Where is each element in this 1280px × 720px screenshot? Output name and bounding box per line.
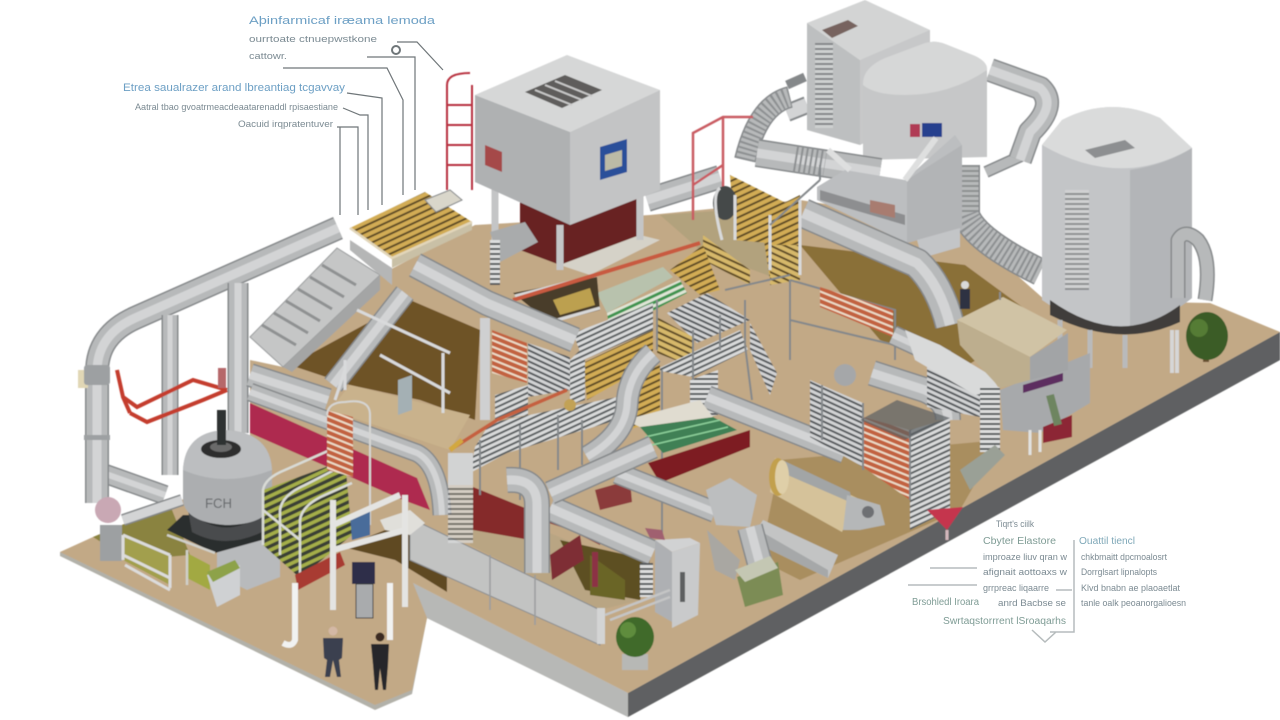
callout: bottom right left column: Brsohledl Iroara <box>912 597 979 608</box>
callout bottom: leader lines <box>908 540 1074 642</box>
person right <box>371 632 389 690</box>
callout: top body text: ourrtoate ctnuepwstkone <box>249 34 377 45</box>
callout: bottom right second column: tanle oalk peoanorgalioesn <box>1081 598 1186 609</box>
callout top: leader lines <box>283 42 443 215</box>
upper centre machine <box>693 117 962 325</box>
callout: bottom right left column: Swrtaqstorrrent lSroaqarhs <box>943 616 1066 627</box>
left rack beside pump <box>263 401 370 590</box>
callout: bottom right left column: improaze liuv qran w <box>983 552 1067 563</box>
middle cylinder tank <box>863 42 987 160</box>
corrugated arch and curved rack <box>448 353 653 543</box>
right machine block <box>905 292 1090 490</box>
callout: bottom right second column: Dorrglsart lipnalopts <box>1081 567 1157 578</box>
callout: second heading: Etrea saualrazer arand lbreantiag tcgavvay <box>123 82 346 94</box>
low fences and small equipment <box>95 497 240 607</box>
pipe left of centre <box>333 265 575 385</box>
person left <box>323 626 343 677</box>
grey machine box on legs <box>475 55 660 270</box>
callout: bottom right left column: Tiqrt's ciilk <box>996 519 1034 530</box>
callout: second body text: Aatral tbao gvoatrmeacdeaatarenaddl rpisaestiane <box>135 102 338 113</box>
callout: bottom right second column <box>1079 536 1186 609</box>
front gate and columns <box>283 495 425 645</box>
callout: bottom right left column: anrd Bacbse se <box>998 598 1066 609</box>
right pipes <box>707 335 947 452</box>
callout: bottom right left column: grrpreac liqaarre <box>983 583 1049 594</box>
green pedestal <box>625 400 750 483</box>
person upper right <box>960 281 970 309</box>
callout: bottom right second column: Ouattil tiencl <box>1079 536 1135 547</box>
callout: top body text: cattowr. <box>249 51 287 62</box>
lower left white rails <box>335 310 450 415</box>
cabinet with louver <box>605 528 700 628</box>
front low wall <box>410 518 605 645</box>
lower duct run <box>507 447 838 607</box>
stairs <box>250 248 380 372</box>
callout: top body text <box>249 34 377 62</box>
callout: second body text: Oacuid irqpratentuver <box>238 119 333 130</box>
callout: bottom right second column: Klvd bnabn ae plaoaetlat <box>1081 583 1180 594</box>
icon: roof vent <box>525 75 602 108</box>
tall server tower <box>807 0 930 145</box>
callout: bottom right left column: Cbyter Elastore <box>983 536 1056 547</box>
big pipe network <box>97 70 1047 520</box>
callout: bottom right left column <box>912 519 1067 627</box>
gold cylinder <box>769 458 885 532</box>
right lower racks <box>810 364 963 540</box>
red wall band <box>250 190 660 545</box>
dome pump <box>167 410 280 590</box>
upper yellow platform and ladder <box>350 73 538 285</box>
plant: front <box>616 617 654 670</box>
corrugated horizontal duct <box>757 153 880 172</box>
dome pump: FCH <box>205 495 232 511</box>
callout: top heading: Aþinfarmicaf iræama lemoda <box>249 15 436 27</box>
central racks <box>480 243 777 537</box>
left red valve piping <box>78 365 227 440</box>
platform base and floor <box>60 200 1280 717</box>
yellow rack cluster, upper middle <box>703 165 895 360</box>
plant: right <box>1186 312 1228 362</box>
icon: blue label <box>600 139 627 180</box>
callout: second body text <box>135 102 338 130</box>
large right tank <box>1042 107 1207 373</box>
callout: bottom right second column: chkbmaitt dpcmoalosrt <box>1081 552 1167 563</box>
small red machines under ducts <box>550 480 632 600</box>
callout: bottom right left column: afignait aottoaxs w <box>983 567 1067 578</box>
